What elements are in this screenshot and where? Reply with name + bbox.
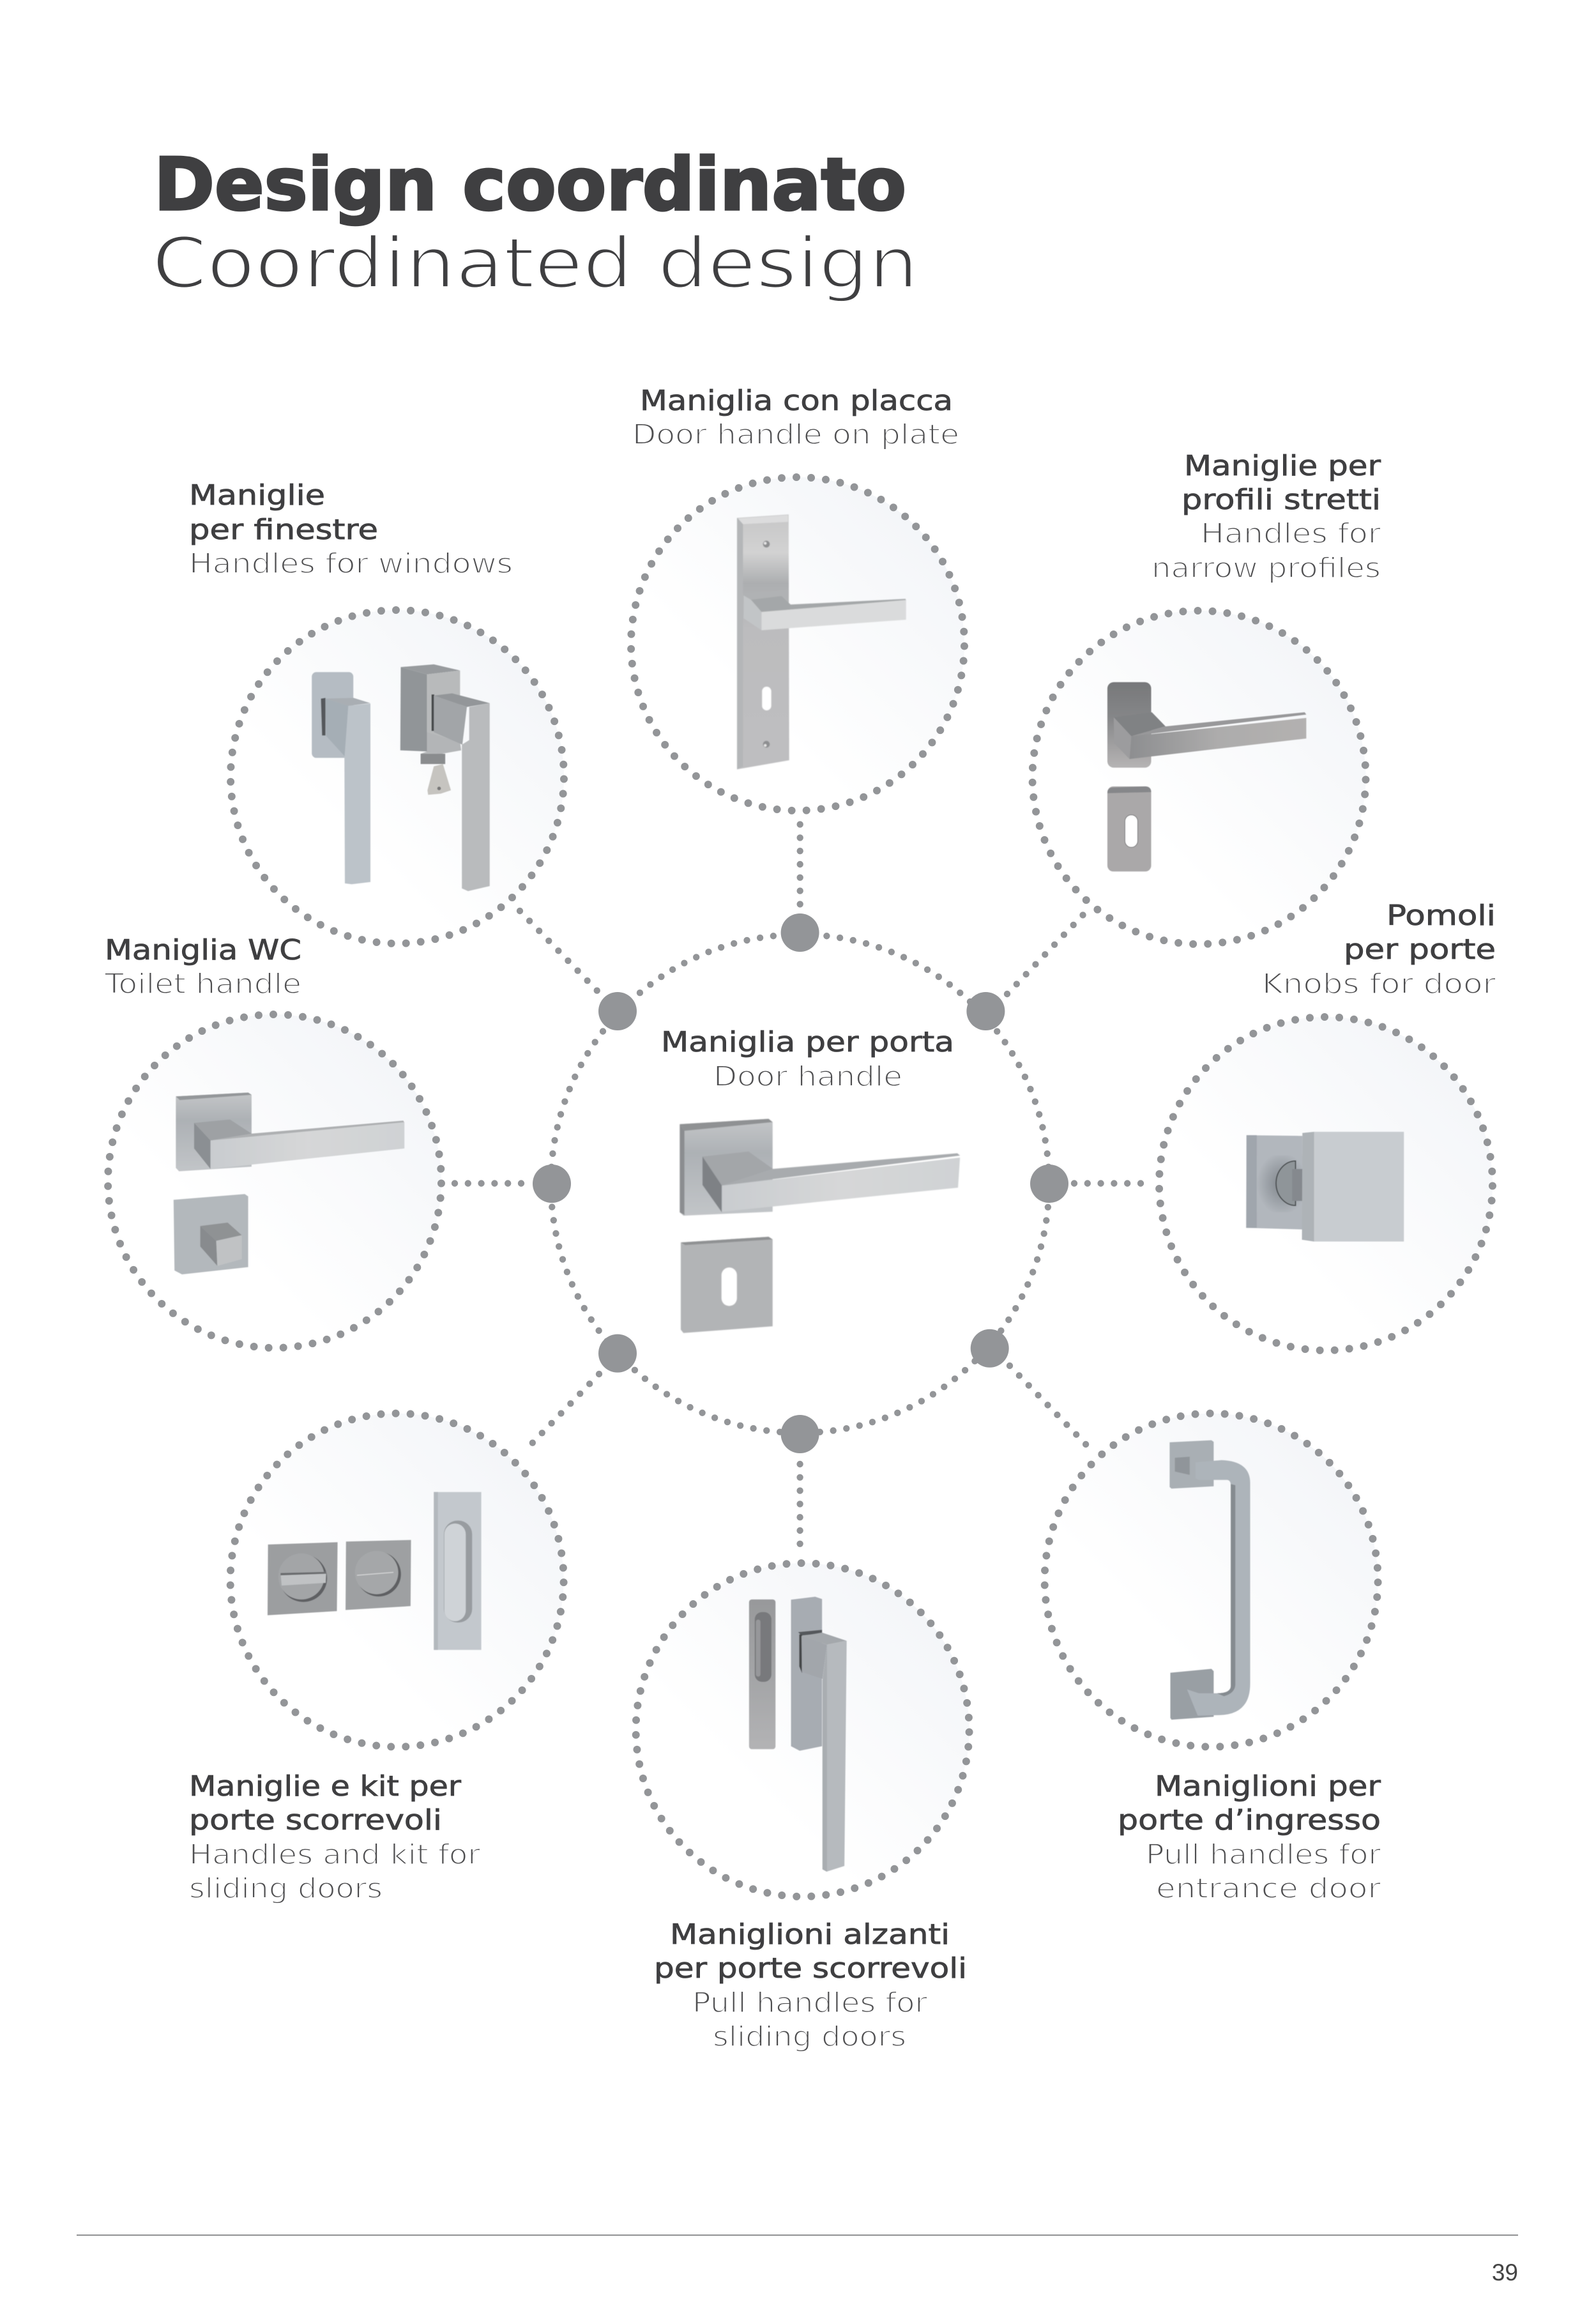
label: knobs for door: per porte: [1344, 933, 1496, 966]
label: handles and kit for sliding doors: Handles and kit for: [189, 1838, 481, 1871]
label: handles and kit for sliding doors: sliding doors: [189, 1872, 383, 1905]
panel: door handle on plate: [631, 477, 964, 811]
central dotted ring with connectors: [455, 825, 1150, 1552]
label: handles for narrow profiles: Handles for: [1201, 517, 1381, 550]
label: handles for narrow profiles: profili stretti: [1182, 484, 1381, 516]
label: handles and kit for sliding doors: [189, 1770, 481, 1905]
label: pull handles for entrance door: Maniglioni per: [1155, 1770, 1381, 1803]
label: handles for narrow profiles: narrow profiles: [1151, 552, 1381, 584]
label: door handle on plate: Door handle on plate: [632, 418, 959, 451]
label: handles for windows: Handles for windows: [189, 547, 513, 580]
icon: sliding door kit: [268, 1492, 482, 1650]
label: knobs for door: [1262, 899, 1496, 1000]
hub node dots: [533, 913, 1068, 1453]
label: toilet handle: Maniglia WC: [105, 934, 301, 966]
label: pull handles for entrance door: [1118, 1770, 1381, 1905]
label: pull handles for sliding doors: per porte scorrevoli: [654, 1952, 967, 1985]
label: pull handles for sliding doors: Maniglioni alzanti: [670, 1918, 950, 1951]
label: pull handles for entrance door: entrance door: [1156, 1872, 1381, 1905]
label: handles for windows: Maniglie: [189, 479, 325, 512]
icon: WC handle and turn knob: [174, 1092, 404, 1274]
heading: door handle: Maniglia per porta: [661, 1026, 954, 1058]
heading: door handle: Door handle: [713, 1060, 902, 1093]
label: handles for windows: per finestre: [189, 514, 378, 546]
label: door handle on plate: [632, 385, 959, 451]
title: [152, 142, 918, 304]
panel: toilet handle: [108, 1014, 441, 1348]
icon: plate handle: [737, 514, 906, 769]
label: handles for windows: [189, 479, 513, 580]
label: door handle on plate: Maniglia con placca: [640, 385, 953, 417]
label: toilet handle: [104, 934, 301, 1000]
label: toilet handle: Toilet handle: [104, 968, 301, 1000]
title: Coordinated design: [152, 222, 918, 304]
panel: handles for windows: [231, 610, 564, 943]
label: handles for narrow profiles: Maniglie per: [1184, 450, 1381, 482]
label: handles for narrow profiles: [1151, 450, 1381, 584]
panel: central door handle: [661, 1026, 960, 1333]
panel: pull handles for entrance door: [1045, 1414, 1378, 1747]
panel: pull handles for sliding doors: [636, 1563, 969, 1897]
icon: entrance pull handle: [1169, 1440, 1250, 1720]
panel: handles and kit for sliding doors: [231, 1414, 564, 1747]
label: pull handles for sliding doors: Pull handles for: [692, 1987, 928, 2019]
icon: narrow handle and escutcheon: [1107, 682, 1306, 871]
label: knobs for door: Pomoli: [1387, 899, 1496, 932]
heading: door handle: [661, 1026, 954, 1093]
page number: 39: [1492, 2259, 1518, 2286]
panel: knobs for door: [1159, 1017, 1493, 1350]
icon: door knob: [1246, 1132, 1404, 1242]
label: pull handles for sliding doors: [654, 1918, 967, 2053]
label: handles and kit for sliding doors: Maniglie e kit per: [189, 1770, 462, 1803]
title: Design coordinato: [154, 142, 906, 227]
label: pull handles for entrance door: porte d’ingresso: [1118, 1804, 1381, 1837]
label: pull handles for sliding doors: sliding doors: [713, 2020, 906, 2053]
panel: handles for narrow profiles: [1032, 611, 1365, 944]
icon: central handle and escutcheon: [680, 1119, 960, 1333]
label: knobs for door: Knobs for door: [1262, 968, 1496, 1000]
icon: window handles: [312, 664, 490, 891]
icon: lift and slide handle: [749, 1597, 847, 1872]
label: pull handles for entrance door: Pull handles for: [1146, 1838, 1381, 1871]
label: handles and kit for sliding doors: porte scorrevoli: [189, 1804, 442, 1837]
